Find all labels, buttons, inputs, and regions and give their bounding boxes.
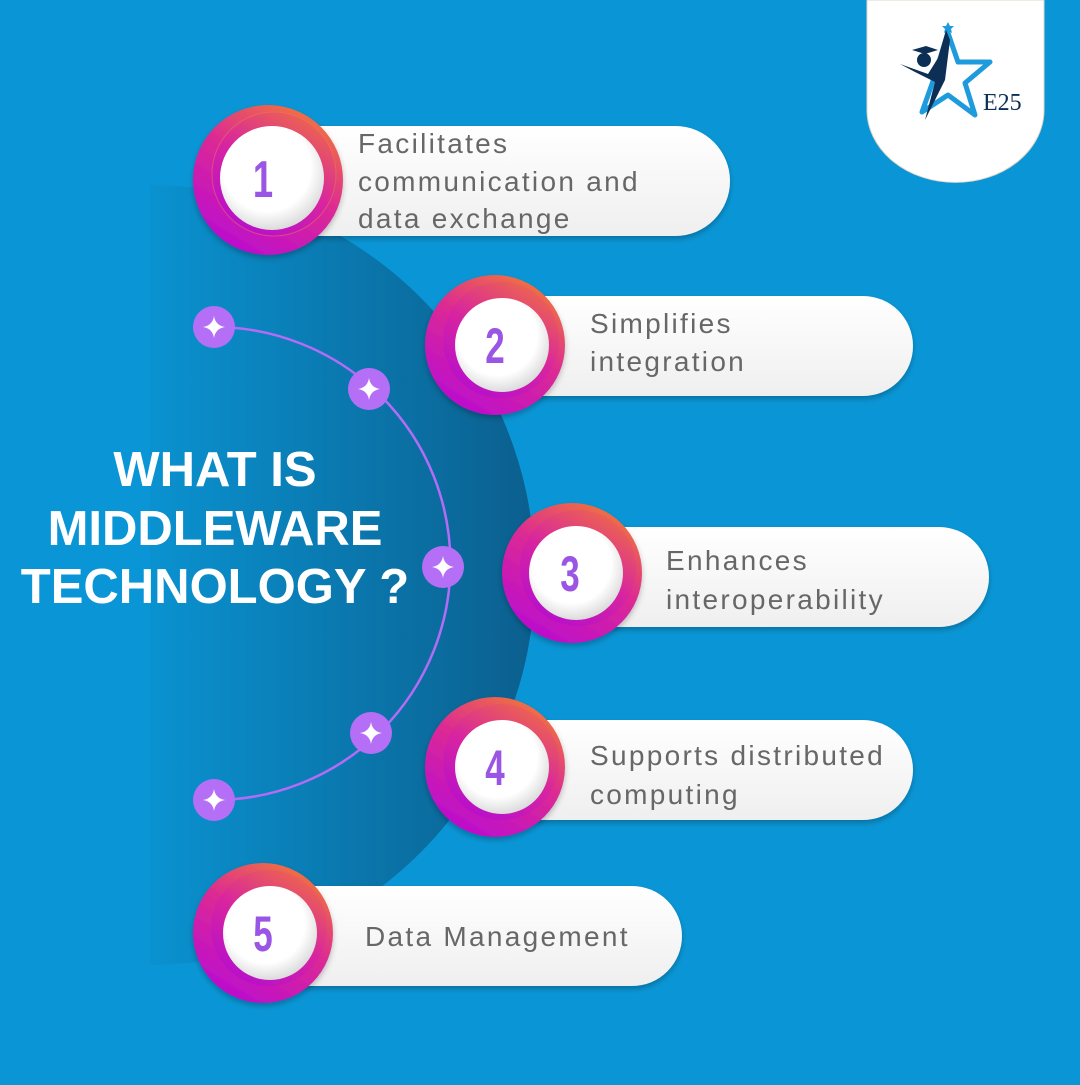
item 1: data exchange bbox=[358, 203, 572, 234]
logo card: E25 bbox=[983, 90, 1022, 116]
item 2 bbox=[425, 275, 913, 415]
item 4: 4 bbox=[485, 741, 505, 797]
item 4: Supports distributed bbox=[590, 740, 885, 771]
item 2: Simplifies bbox=[590, 308, 733, 339]
item 1: communication and bbox=[358, 166, 640, 197]
arc with sparkle nodes bbox=[193, 306, 464, 821]
icon: star bbox=[922, 33, 990, 115]
item 4: computing bbox=[590, 779, 740, 810]
title: WHAT IS bbox=[113, 443, 317, 497]
background semicircle bbox=[150, 185, 535, 965]
item 3: Enhances bbox=[666, 545, 809, 576]
item 5: 5 bbox=[253, 907, 273, 963]
title bbox=[21, 443, 409, 614]
item 3: interoperability bbox=[666, 584, 885, 615]
item 1: Facilitates bbox=[358, 128, 509, 159]
item 3 bbox=[502, 503, 989, 643]
item 3: 3 bbox=[560, 547, 580, 603]
title: TECHNOLOGY ? bbox=[21, 560, 409, 614]
item 1 bbox=[193, 105, 730, 255]
title: MIDDLEWARE bbox=[48, 502, 382, 556]
item 1: 1 bbox=[253, 149, 273, 209]
item 4 bbox=[425, 697, 913, 837]
item 2: 2 bbox=[485, 319, 505, 375]
item 5: Data Management bbox=[365, 921, 630, 952]
item 2: integration bbox=[590, 346, 746, 377]
item 5 bbox=[193, 863, 682, 1003]
logo card bbox=[867, 0, 1044, 182]
